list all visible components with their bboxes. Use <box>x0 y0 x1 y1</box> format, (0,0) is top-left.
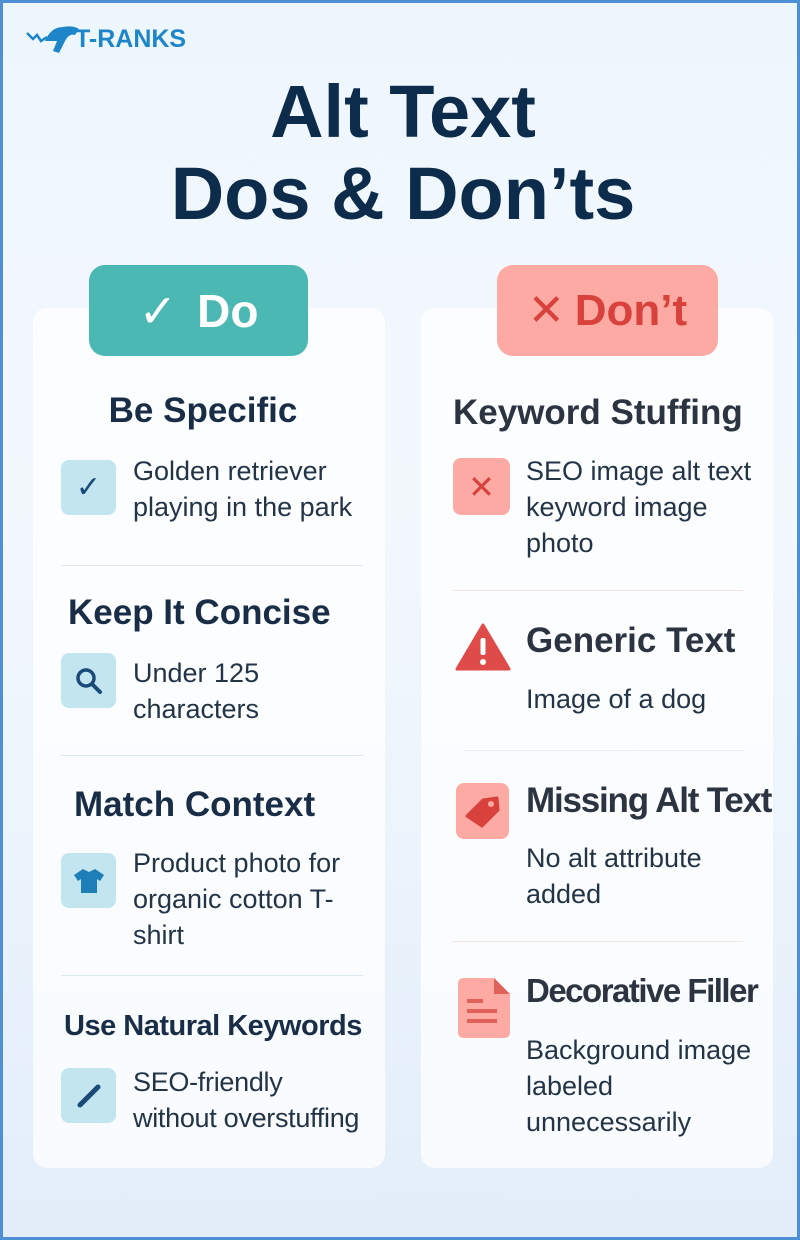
dont item: stuffing: keyword image <box>526 492 708 522</box>
dont item: stuffing: ✕ <box>468 468 495 504</box>
badge: dont: Don’t <box>575 286 687 334</box>
do item: be specific: playing in the park <box>133 492 352 522</box>
do item: context: Match Context <box>74 785 315 824</box>
do item: concise <box>61 593 331 724</box>
do item: keywords: Use Natural Keywords <box>64 1010 362 1042</box>
panel: dont <box>421 308 773 1168</box>
dont item: missing: added <box>526 879 601 909</box>
badge: dont: ✕ <box>528 286 565 335</box>
title <box>171 70 635 235</box>
do item: context: Product photo for <box>133 848 340 878</box>
dont item: missing: No alt attribute <box>526 843 702 873</box>
dont item: stuffing: Keyword Stuffing <box>453 393 743 432</box>
dont item: decorative: unnecessarily <box>526 1107 691 1137</box>
do item: concise: Under 125 <box>133 658 259 688</box>
dont item: missing <box>456 781 772 909</box>
dont item: generic: Image of a dog <box>526 684 706 714</box>
do item: context: organic cotton T- <box>133 884 334 914</box>
dont item: decorative: labeled <box>526 1071 613 1101</box>
dont item: missing: Missing Alt Text <box>526 781 771 820</box>
do item: be specific: ✓ <box>76 471 101 504</box>
dont item: generic <box>456 621 735 714</box>
dont item: stuffing <box>453 393 751 558</box>
logo <box>26 25 186 53</box>
do item: keywords <box>61 1010 362 1133</box>
dont item: decorative: Decorative Filler <box>526 972 757 1009</box>
dont item: generic: Generic Text <box>526 621 735 660</box>
title: Dos & Don’ts <box>171 152 635 235</box>
do item: context <box>61 785 340 950</box>
do item: be specific: Be Specific <box>109 391 297 430</box>
do item: be specific: Golden retriever <box>133 456 327 486</box>
do item: context: shirt <box>133 920 184 950</box>
do item: concise: Keep It Concise <box>68 593 331 632</box>
badge: do: ✓ <box>139 284 177 336</box>
badge: do: Do <box>197 284 258 336</box>
do item: keywords: SEO-friendly <box>133 1067 282 1097</box>
badge: do <box>89 265 308 356</box>
dont item: decorative: Background image <box>526 1035 751 1065</box>
do item: be specific <box>61 391 352 522</box>
do item: concise: characters <box>133 694 259 724</box>
logo: T-RANKS <box>75 25 186 53</box>
dont item: stuffing: SEO image alt text <box>526 456 751 486</box>
do item: keywords: without overstuffing <box>133 1103 359 1133</box>
panel: do <box>33 308 385 1168</box>
dont item: stuffing: photo <box>526 528 594 558</box>
badge: dont <box>497 265 718 356</box>
title: Alt Text <box>270 70 536 153</box>
dont item: decorative <box>458 972 758 1137</box>
